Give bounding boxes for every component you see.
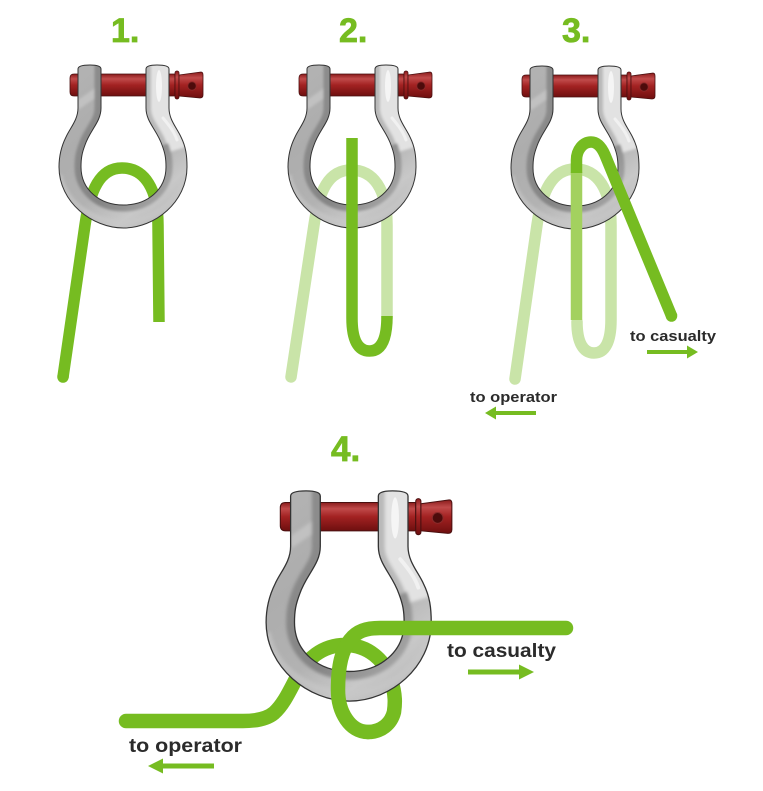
- panel: step 2: [284, 12, 432, 377]
- arrow: to casualty: [468, 664, 534, 680]
- panel: step 1: [55, 12, 203, 383]
- rope: step 1: [63, 168, 159, 377]
- label: to operator: to operator: [129, 736, 243, 757]
- rope: faded first pass: [291, 170, 387, 377]
- panel: step 3: [470, 12, 717, 420]
- rope: middle strand: [571, 172, 582, 320]
- heading: 3.: 3.: [562, 12, 590, 50]
- icon: shackle: [261, 484, 452, 706]
- rope: faded first pass: [515, 169, 611, 379]
- arrow: to operator: [148, 758, 214, 774]
- label: to operator: to operator: [470, 389, 557, 406]
- rope: rear section behind shackle: [126, 645, 395, 732]
- rope: active strand: [352, 138, 387, 351]
- rope: front section over shackle: [338, 628, 566, 732]
- arrow: to casualty: [647, 346, 698, 358]
- arrow: to operator: [485, 406, 536, 420]
- label: to casualty: to casualty: [447, 641, 556, 662]
- label: to casualty: to casualty: [630, 328, 717, 345]
- panel: step 4: [126, 430, 566, 774]
- icon: rope end cap: [666, 310, 677, 322]
- icon: shackle: [284, 60, 432, 232]
- icon: shackle: [507, 61, 655, 233]
- rope: active strand: [576, 142, 672, 317]
- icon: rope end cap: [57, 371, 69, 383]
- heading: 2.: 2.: [339, 12, 367, 50]
- heading: 4.: 4.: [331, 430, 360, 469]
- icon: shackle: [55, 60, 203, 232]
- heading: 1.: 1.: [111, 12, 139, 50]
